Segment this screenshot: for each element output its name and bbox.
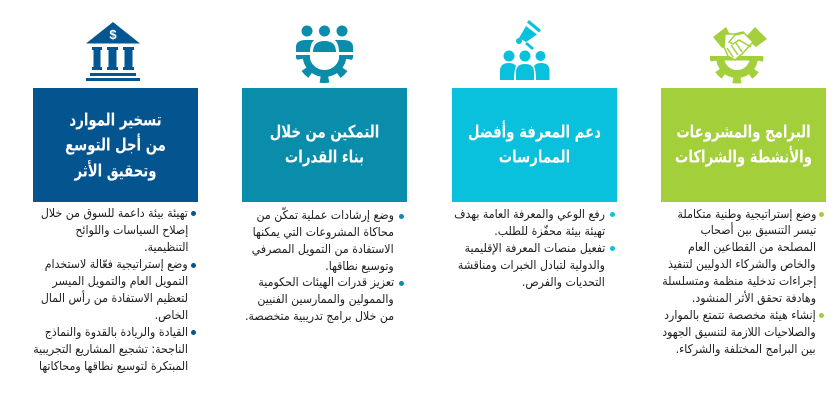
text block: programs list: إنشاء هيئة مخصصة تتمتع بالموارد — [664, 308, 816, 322]
text block: resources list: الخاص. — [154, 308, 188, 322]
panel: knowledge: الممارسات — [499, 146, 570, 167]
text block: knowledge list: والدولية لتبادل الخبرات ومناقشة — [458, 258, 605, 272]
text block: resources list — [33, 206, 196, 373]
text block: resources list: وضع إستراتيجية فعّالة لاستخدام — [45, 257, 188, 271]
panel: programs: البرامج والمشروعات — [676, 121, 811, 142]
panel: capacity: بناء القدرات — [285, 146, 364, 167]
text block: knowledge list — [454, 207, 615, 289]
text block: knowledge list: تهيئة بيئة محفّزة للطلب. — [494, 224, 605, 238]
panel: capacity — [242, 88, 407, 202]
text block: capacity list — [245, 206, 404, 323]
panel: programs: والأنشطة والشراكات — [675, 146, 812, 167]
text block: knowledge list: التحديات والفرص. — [522, 275, 605, 289]
text block: resources list: لتعظيم الاستفادة من رأس المال — [41, 291, 188, 305]
icon: bank with dollar sign: $ — [109, 27, 117, 42]
text block: capacity list: وضع إرشادات عملية تمكّن من — [257, 208, 394, 222]
text block: resources list: إصلاح السياسات واللوائح — [75, 223, 188, 237]
text block: programs list: تيسر التنسيق بين أصحاب — [700, 223, 816, 237]
text block: resources list: القيادة والريادة بالقدوة والنماذج — [45, 325, 188, 339]
text block: programs list: وضع إستراتيجية وطنية متكاملة — [677, 207, 816, 221]
text block: programs list: إجراءات تدخلية منظمة ومتسلسلة — [662, 274, 816, 288]
text block: resources list: المبتكرة لتوسيع نطاقها ومحاكاتها — [39, 359, 188, 373]
text block: programs list: والصلاحيات اللازمة لتنسيق الجهود — [663, 325, 816, 339]
text block: resources list: التنظيمية. — [144, 240, 188, 254]
panel: resources: تسخير الموارد — [69, 109, 162, 130]
panel: capacity: التمكين من خلال — [270, 121, 379, 142]
text block: capacity list: الاستفادة من التمويل المصرفي — [252, 242, 394, 256]
icon: bank with dollar sign — [86, 22, 140, 81]
text block: resources list: تهيئة بيئة داعمة للسوق من خلال — [41, 206, 188, 220]
panel: resources: وتحقيق الأثر — [74, 160, 157, 181]
text block: resources list: التمويل العام والتمويل الميسر — [52, 274, 188, 288]
text block: programs list: بين البرامج المختلفة والشركاء. — [676, 342, 816, 356]
text block: capacity list: محاكاة المشروعات التي يمكنها — [253, 225, 394, 239]
panel: knowledge: دعم المعرفة وأفضل — [468, 121, 601, 142]
icon: megaphone over audience — [500, 20, 550, 80]
text block: resources list: الناجحة: تشجيع المشاريع التجريبية — [33, 342, 188, 356]
panel: resources — [33, 88, 198, 202]
panel: knowledge — [452, 88, 617, 202]
text block: programs list: وهادفة تحقق الأثر المنشود. — [692, 291, 816, 305]
text block: capacity list: من خلال برامج تدريبية متخصصة. — [245, 309, 394, 323]
text block: knowledge list: تفعيل منصات المعرفة الإقليمية — [464, 241, 605, 255]
text block: knowledge list: رفع الوعي والمعرفة العامة بهدف — [454, 207, 605, 221]
text block: capacity list: والممولين والممارسين الفنيين — [258, 292, 394, 306]
text block: programs list: المصلحة من القطاعين العام — [688, 240, 816, 254]
text block: capacity list: تعزيز قدرات الهيئات الحكومية — [258, 275, 394, 289]
text block: capacity list: وتوسيع نطاقها. — [326, 259, 394, 273]
icon: people over gear — [296, 26, 353, 83]
panel: programs — [661, 88, 826, 202]
text block: programs list: والخاص والشركاء الدوليين لتنفيذ — [668, 257, 816, 271]
icon: handshake over gear — [710, 27, 767, 84]
panel: resources: من أجل التوسع — [65, 134, 166, 155]
